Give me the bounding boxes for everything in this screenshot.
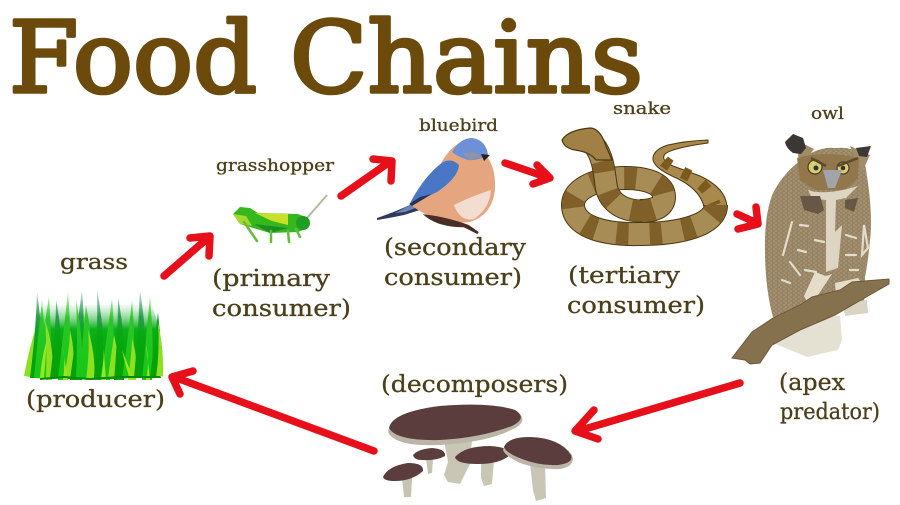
label: secondary consumer: (secondary: [384, 235, 526, 261]
label: apex predator: (apex: [779, 370, 845, 396]
label: tertiary consumer: [567, 263, 705, 319]
label: owl: owl: [811, 104, 844, 123]
arrow: owl to mushrooms: [575, 383, 740, 439]
label: decomposers: (decomposers): [381, 372, 568, 398]
label: secondary consumer: consumer): [384, 265, 522, 291]
grasshopper illustration: [233, 195, 327, 242]
arrow: grasshopper to bluebird: [341, 159, 392, 196]
snake illustration: [562, 128, 727, 234]
label: producer: (producer): [26, 387, 165, 413]
grass illustration: [24, 289, 163, 380]
bluebird illustration: [377, 138, 495, 233]
label: secondary consumer: [384, 235, 526, 291]
label: grasshopper: grasshopper: [216, 156, 334, 175]
label: apex predator: [779, 370, 880, 425]
label: primary consumer: consumer): [212, 296, 351, 322]
label: apex predator: predator): [780, 400, 880, 425]
arrow: mushrooms to grass: [172, 371, 374, 451]
label: tertiary consumer: (tertiary: [568, 263, 680, 289]
label: bluebird: bluebird: [419, 116, 498, 135]
title: Food: [9, 2, 257, 116]
arrow: grass to grasshopper: [164, 236, 210, 276]
label: snake: snake: [613, 99, 671, 118]
label: grass: grass: [60, 250, 128, 274]
snake tail: [653, 140, 727, 207]
label: tertiary consumer: consumer): [567, 293, 705, 319]
label: primary consumer: (primary: [212, 266, 330, 292]
mushrooms illustration: [383, 405, 573, 501]
arrow: snake to owl: [737, 207, 758, 229]
owl illustration: [732, 134, 889, 364]
title: Chains: [290, 2, 643, 116]
label: primary consumer: [212, 266, 351, 322]
title: [9, 2, 643, 116]
arrow: bluebird to snake: [505, 163, 550, 184]
